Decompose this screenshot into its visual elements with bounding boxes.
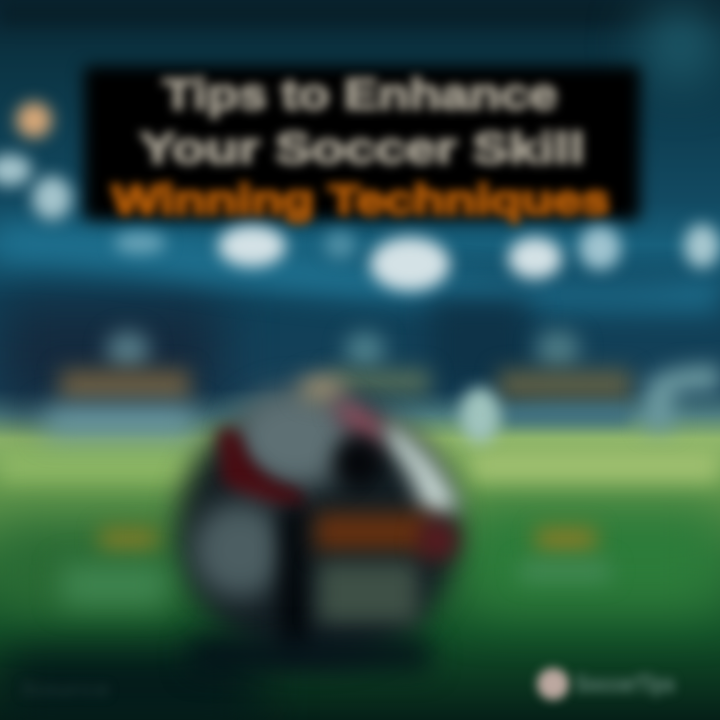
ball dark patch: [334, 436, 382, 488]
soccer ball: [178, 374, 460, 670]
column: tip 2: [330, 332, 430, 394]
column: tip 3: [498, 330, 632, 423]
ball right red accent: [418, 520, 458, 560]
title panel: [84, 66, 640, 223]
goal post glow: [645, 365, 720, 430]
lower label left: [62, 528, 167, 605]
icon: small orange circle: [16, 102, 52, 138]
lower text right: [520, 562, 610, 580]
ball red band top: [335, 398, 385, 450]
ball orange label: [315, 513, 430, 551]
ball upper grey panel: [233, 388, 357, 488]
title line 2: Your Soccer Skill: [140, 124, 584, 173]
ball shadow base: [190, 640, 430, 670]
title line 1: Tips to Enhance: [162, 70, 558, 119]
lower text left: [62, 565, 167, 605]
icon: tip 3: [536, 330, 580, 368]
lower label right: [520, 528, 610, 580]
ball top tan tip: [298, 374, 346, 402]
ball white right panel: [385, 420, 460, 515]
stadium lights row: [0, 154, 720, 291]
ball lower-left panel: [192, 502, 288, 598]
ball maroon band: [218, 429, 305, 508]
icon: tip 1: [106, 331, 150, 369]
text: tip 1: [45, 408, 195, 436]
column: tip 1: [45, 331, 195, 436]
logo text: SoccerTips: [575, 671, 675, 698]
heading: tip 2: [330, 370, 430, 394]
footer source note: Source: [20, 679, 110, 701]
icon: tip 2: [345, 332, 385, 368]
ball centre seam: [280, 510, 308, 650]
text: tip 3: [500, 408, 630, 423]
ball lower-right panel: [318, 562, 418, 624]
heading: tip 3: [498, 370, 632, 400]
logo icon: [537, 668, 569, 700]
title line 3: orange highlight: Winning Techniques: [112, 176, 610, 223]
heading: tip 1: [60, 370, 190, 400]
footer logo: [537, 668, 675, 700]
